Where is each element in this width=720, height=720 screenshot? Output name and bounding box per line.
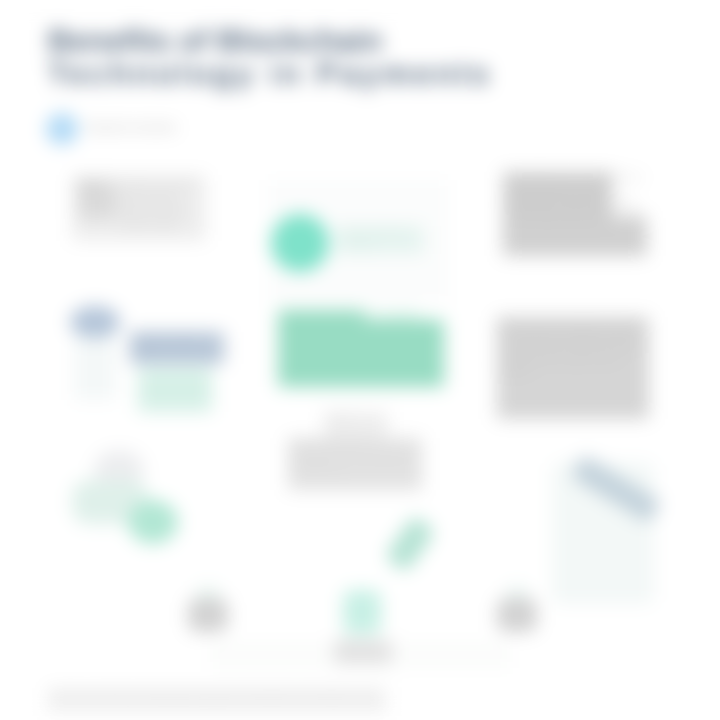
- panel: right top text: Transactions are recorded on a shared ledger that every participant in the network can verify independently at any time.: [503, 172, 646, 220]
- title: Benefits of Blockchain: [48, 24, 382, 58]
- panel: right middle text: Removing intermediaries lowers fees, shortens settlement times and gives users a clear record of each payment made across borders.: [497, 317, 642, 378]
- icon: sender node: [70, 306, 120, 338]
- accent: bottom right diagonal bar: [570, 454, 662, 524]
- pale green band: [72, 480, 148, 524]
- icon: right device: [494, 586, 540, 634]
- flow header: Payment ledger entry: [130, 332, 200, 356]
- central label: [334, 640, 392, 664]
- icon: diagonal green marker: [384, 515, 436, 573]
- panel: right top text: [503, 172, 647, 256]
- subtitle: Payment overview: [86, 122, 176, 134]
- heading: centre lower text: [324, 412, 388, 440]
- icon: blue badge: [46, 113, 78, 145]
- heading: top left text: Fast: [78, 181, 99, 192]
- footer note: Source: summary of blockchain payment benefits and related notes: [48, 688, 376, 700]
- device top: [198, 586, 218, 602]
- footer note: [48, 688, 386, 712]
- panel: central card: [268, 180, 448, 302]
- panel: centre lower text: [282, 410, 427, 495]
- device body: [188, 598, 228, 632]
- faint column: [74, 334, 116, 400]
- panel: top left text: [72, 175, 206, 241]
- panel: left flow diagram: [62, 296, 234, 420]
- illustration: bottom right document: [552, 462, 654, 604]
- panel: top left text: Settlement takes place quickly between parties without delay.: [120, 181, 194, 230]
- flow header: [130, 332, 224, 364]
- panel: green highlight: Lower costs and faster transfers: [278, 310, 420, 321]
- illustration: bottom left: [67, 450, 187, 554]
- base strip: [210, 642, 510, 668]
- icon: green circle: [271, 214, 329, 272]
- title: Technology in Payments: [48, 56, 492, 91]
- device body: [497, 598, 537, 632]
- icon: central green marker: [343, 590, 381, 634]
- grey node: [94, 450, 144, 488]
- green node: [128, 500, 178, 544]
- card label: Secure payment network: [338, 226, 411, 250]
- body: centre lower text: [288, 438, 422, 490]
- heading: top left text: [78, 181, 116, 219]
- heading: centre lower text: Result: [324, 412, 352, 423]
- central label: Network: [334, 640, 371, 651]
- panel: green highlight: [278, 310, 444, 387]
- flow result: [138, 368, 212, 412]
- panel: right middle text: [497, 317, 649, 419]
- icon: left device: [186, 586, 230, 634]
- body: centre lower text: Greater trust and transparency for all payment participants.: [288, 438, 414, 474]
- device top: [507, 586, 527, 602]
- title: [38, 18, 497, 100]
